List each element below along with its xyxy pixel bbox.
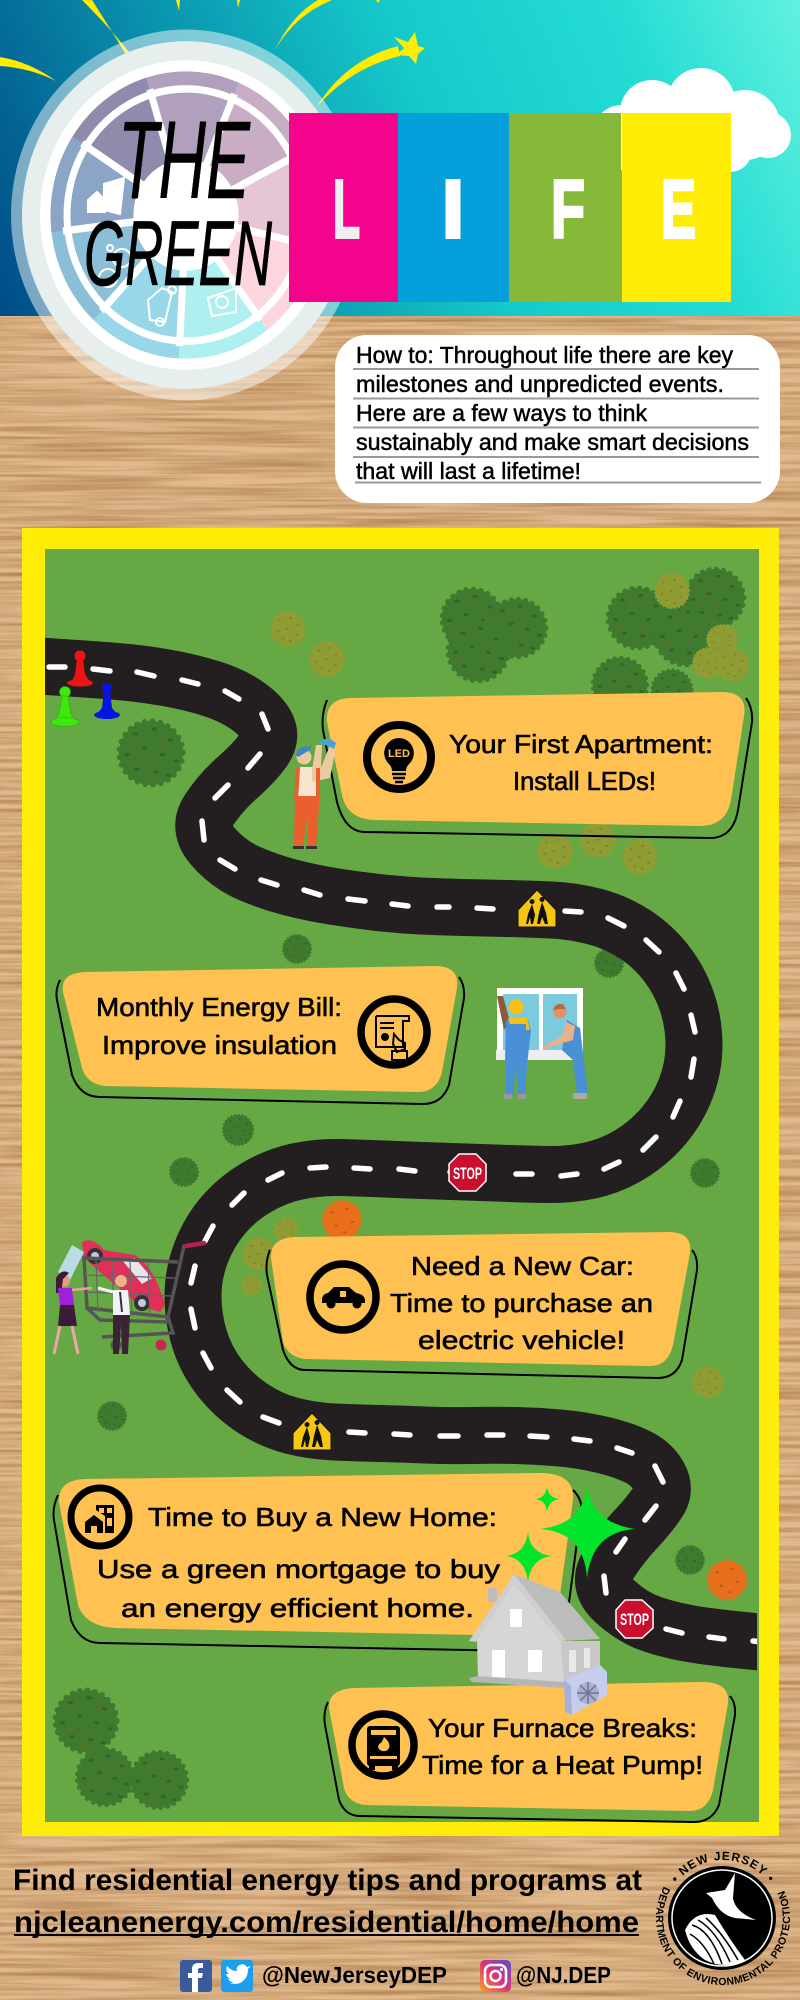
- icon: energy bill: [361, 999, 427, 1065]
- game piece: green: [51, 686, 79, 726]
- panel: furnace: Time for a Heat Pump!: [422, 1750, 703, 1780]
- game piece: red: [67, 650, 93, 686]
- social handle: nj dep: @NJ.DEP: [516, 1962, 611, 1988]
- how-to panel: that will last a lifetime!: [356, 458, 581, 484]
- school crossing sign 2: [293, 1413, 331, 1450]
- house: [469, 1574, 600, 1688]
- game piece: blue: [94, 683, 120, 719]
- icon: led bulb: [367, 725, 431, 789]
- how-to panel: sustainably and make smart decisions: [356, 429, 749, 455]
- how-to panel: How to: Throughout life there are key: [356, 342, 733, 368]
- workers installing window: [496, 988, 588, 1099]
- panel: furnace: Your Furnace Breaks:: [428, 1713, 697, 1743]
- panel: monthly energy bill: [56, 966, 464, 1104]
- life letter blocks: E: [661, 162, 696, 256]
- panel: first apartment: Install LEDs!: [513, 766, 656, 796]
- icon: home: [71, 1488, 129, 1546]
- nj dep seal: • NEW JERSEY •: [673, 1852, 772, 1881]
- shooting stars: [0, 0, 425, 108]
- life letter blocks: [289, 113, 731, 302]
- worker changing led bulb: [293, 739, 336, 849]
- how-to panel: [335, 335, 780, 503]
- life letter blocks: F: [551, 162, 585, 256]
- how-to panel: milestones and unpredicted events.: [356, 371, 724, 397]
- panel: new home: [54, 1473, 581, 1651]
- panel: new car: electric vehicle!: [418, 1325, 625, 1355]
- panel: new car: Need a New Car:: [411, 1251, 634, 1281]
- panel: monthly energy bill: Monthly Energy Bill:: [96, 992, 342, 1022]
- school crossing sign 1: [518, 890, 556, 927]
- title: the green: GREEN: [84, 203, 272, 305]
- panel: new home: an energy efficient home.: [121, 1593, 474, 1623]
- social: instagram: [480, 1960, 511, 1992]
- road: [40, 666, 770, 1643]
- panel: new car: [266, 1232, 697, 1378]
- footer text: Find residential energy tips and programs at: [13, 1864, 642, 1897]
- panel: new car: Time to purchase an: [390, 1288, 653, 1318]
- footer text: [13, 1864, 642, 1939]
- car in shopping cart with buyers: [54, 1240, 204, 1354]
- sparkles: [506, 1484, 635, 1582]
- footer text: njcleanenergy.com/residential/home/home: [14, 1906, 639, 1939]
- social: twitter: [221, 1960, 253, 1992]
- panel: first apartment: [322, 692, 752, 838]
- how-to panel: Here are a few ways to think: [356, 400, 647, 426]
- panel: first apartment: Your First Apartment:: [449, 729, 713, 759]
- icon: electric car: [310, 1264, 376, 1330]
- panel: new home: Time to Buy a New Home:: [148, 1502, 497, 1532]
- trees and bushes: [55, 569, 749, 1808]
- icon: led bulb: LED: [388, 748, 410, 760]
- panel: furnace: [324, 1682, 735, 1822]
- stop sign 1: STOP: [453, 1164, 482, 1183]
- stop sign 1: [449, 1154, 486, 1191]
- title: the green: [84, 99, 272, 305]
- social handle: new jersey dep: @NewJerseyDEP: [262, 1962, 447, 1988]
- wheel of life: [4, 22, 368, 408]
- nj dep seal: DEPARTMENT OF ENVIRONMENTAL PROTECTION: [656, 1886, 790, 1986]
- title: the green: THE: [118, 99, 251, 222]
- life letter blocks: I: [442, 162, 465, 256]
- panel: new home: Use a green mortgage to buy: [97, 1554, 500, 1584]
- sky header: [0, 0, 800, 316]
- icon: furnace: [352, 1714, 414, 1776]
- cloud: [592, 68, 791, 172]
- stop sign 2: STOP: [620, 1610, 649, 1629]
- stop sign 2: [616, 1600, 653, 1638]
- game board frame: [22, 528, 779, 1836]
- life letter blocks: L: [333, 162, 360, 256]
- heat pump unit: [564, 1665, 607, 1715]
- wheel icons: [88, 178, 236, 326]
- panel: monthly energy bill: Improve insulation: [102, 1030, 337, 1060]
- social: facebook: [180, 1960, 212, 1992]
